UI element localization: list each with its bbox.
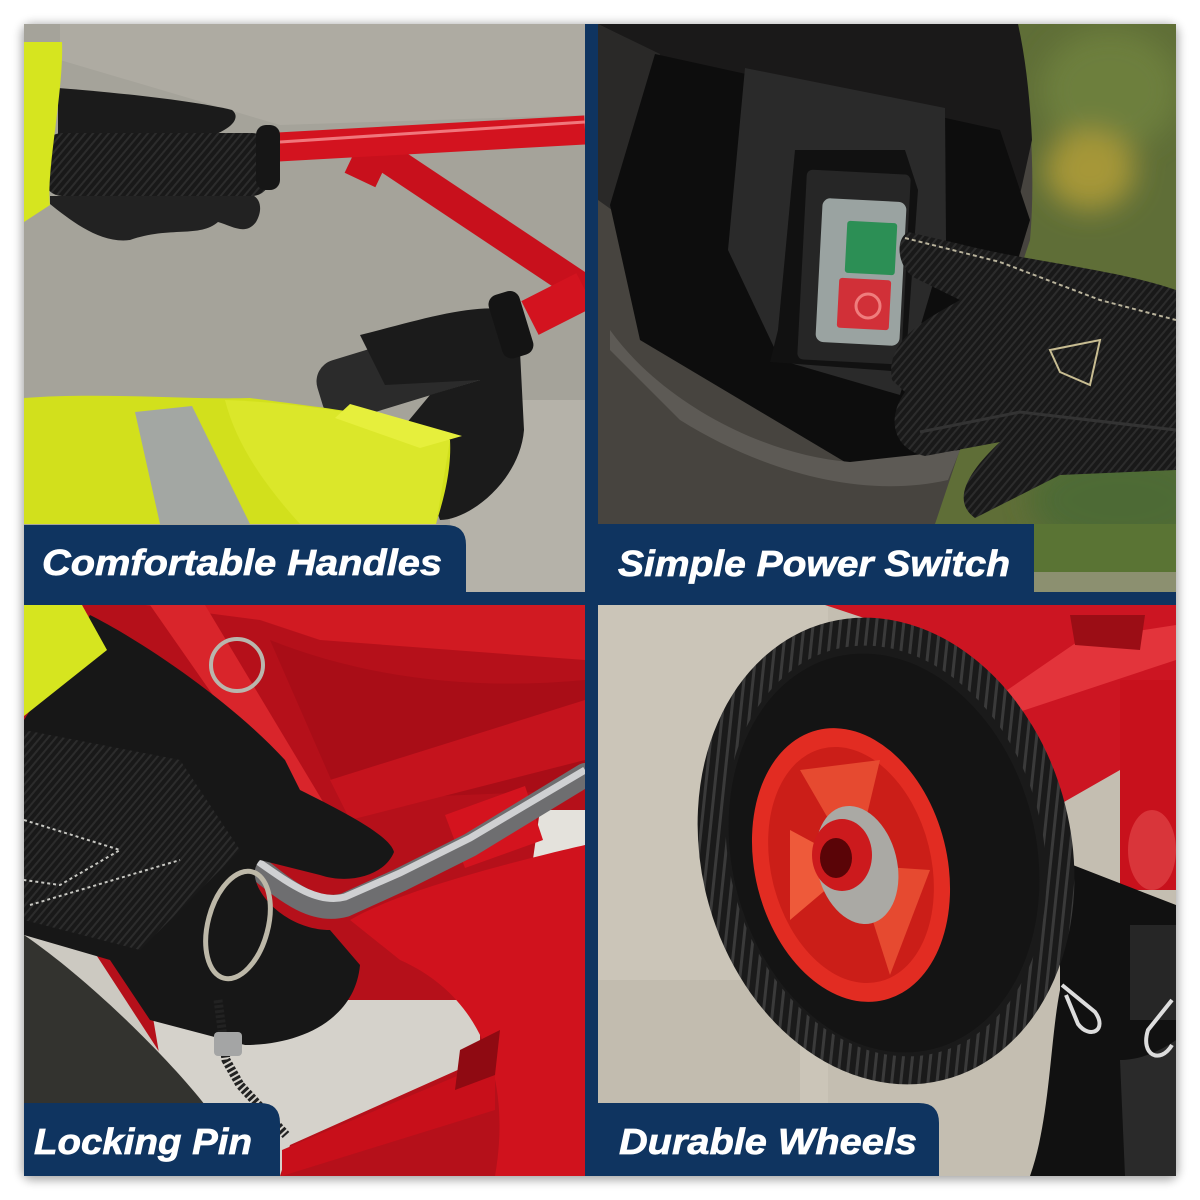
- label: simple power switch: Simple Power Switch: [618, 543, 1010, 584]
- cotter pins: [1062, 985, 1100, 1032]
- panel: durable wheels: [598, 594, 1176, 1176]
- panel: locking pin: [24, 605, 585, 1176]
- mixer housing: [598, 143, 1032, 524]
- red button: [837, 278, 891, 330]
- label: durable wheels: Durable Wheels: [619, 1121, 917, 1162]
- pavement background: [24, 24, 585, 526]
- panel: simple power switch: [598, 24, 1200, 550]
- gloved hand: [891, 232, 1176, 518]
- top handle grip: [44, 133, 270, 196]
- tyre corner: [24, 935, 205, 1105]
- wheel: [698, 618, 1074, 1084]
- label: comfortable handles: [24, 525, 466, 592]
- label: durable wheels: [598, 1103, 939, 1176]
- coiled lanyard: [218, 1000, 286, 1135]
- red handle frame: [260, 130, 585, 318]
- concrete background: [828, 606, 1176, 1176]
- label: locking pin: Locking Pin: [34, 1121, 252, 1162]
- black legs and stand: [1030, 860, 1176, 1176]
- locking pin: [245, 775, 585, 907]
- lower handle grip: [316, 350, 480, 412]
- reflective stripe: [135, 406, 250, 524]
- small ring: [211, 639, 263, 691]
- panel: comfortable handles: [24, 24, 585, 592]
- split ring: [203, 868, 273, 982]
- recessed panel: [610, 54, 1030, 465]
- top yellow sleeve: [24, 42, 62, 222]
- top glove: [58, 88, 236, 136]
- glove: [24, 615, 394, 1045]
- lower red tube: [350, 845, 585, 1176]
- red mixer frame background: [24, 605, 585, 1176]
- yellow cuff: [24, 605, 107, 716]
- hub washer: [818, 806, 898, 924]
- switch mount: [770, 150, 918, 372]
- label: simple power switch: [598, 524, 1176, 605]
- lower glove: [360, 308, 524, 520]
- red collar: [445, 786, 543, 868]
- red chassis: [825, 605, 1176, 802]
- tyre: [698, 618, 1074, 1084]
- red hub: [752, 728, 950, 1002]
- axle: [812, 819, 872, 891]
- lower yellow sleeve: [24, 396, 450, 524]
- switch cover: [815, 198, 907, 346]
- green button: [845, 221, 897, 275]
- label: locking pin: [24, 1103, 280, 1176]
- foliage background: [935, 24, 1176, 524]
- label: comfortable handles: Comfortable Handles: [42, 542, 442, 583]
